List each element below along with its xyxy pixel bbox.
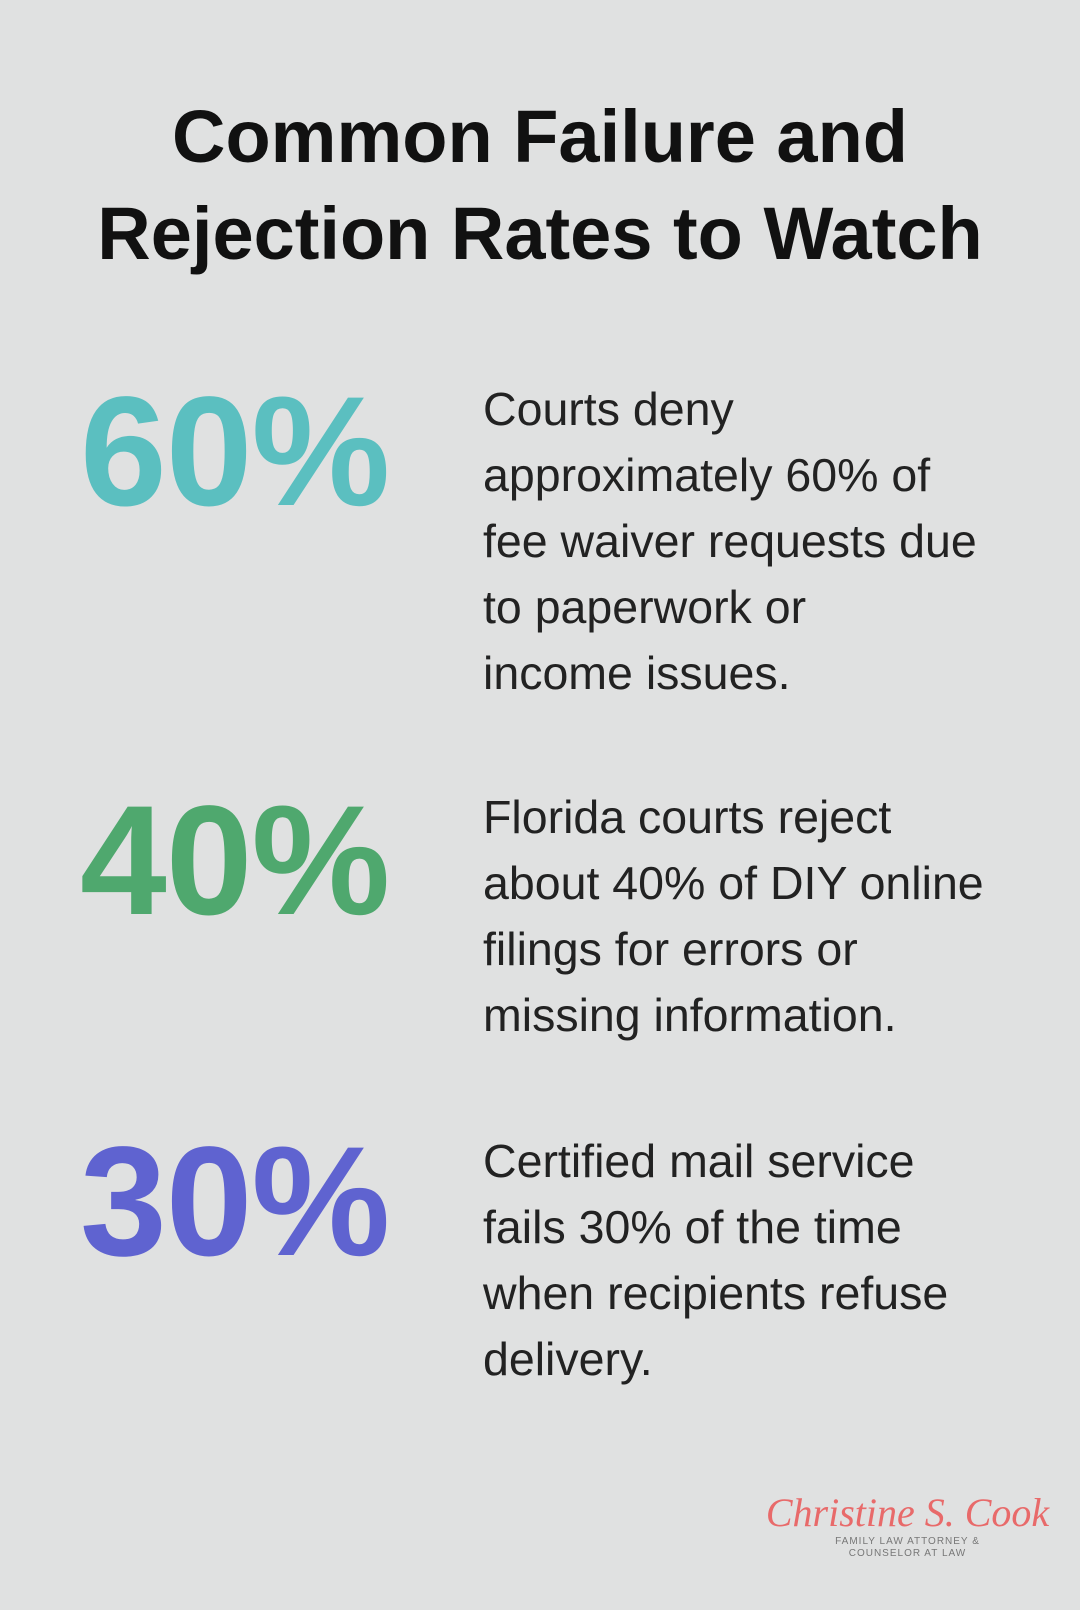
text: 30% description: delivery. bbox=[483, 1333, 653, 1385]
text: 40% description: missing information. bbox=[483, 989, 896, 1041]
text: 60% description: to paperwork or bbox=[483, 581, 806, 633]
title: Common Failure and bbox=[172, 95, 908, 178]
title: Rejection Rates to Watch bbox=[97, 192, 983, 275]
text: 30% description: fails 30% of the time bbox=[483, 1201, 902, 1253]
text: 40% description: filings for errors or bbox=[483, 923, 858, 975]
text: 40% description: about 40% of DIY online bbox=[483, 857, 984, 909]
logo bbox=[766, 1490, 1050, 1559]
logo: FAMILY LAW ATTORNEY & bbox=[835, 1536, 980, 1547]
title bbox=[97, 95, 983, 275]
stat: 40%: 40% bbox=[80, 774, 389, 948]
stat: 30%: 30% bbox=[80, 1115, 389, 1289]
text: 60% description: fee waiver requests due bbox=[483, 515, 977, 567]
text: 30% description: Certified mail service bbox=[483, 1135, 915, 1187]
text: 60% description bbox=[483, 383, 977, 699]
text: 60% description: approximately 60% of bbox=[483, 449, 930, 501]
logo: Christine S. Cook bbox=[766, 1490, 1049, 1535]
text: 30% description bbox=[483, 1135, 948, 1385]
text: 60% description: Courts deny bbox=[483, 383, 734, 435]
text: 40% description bbox=[483, 791, 984, 1041]
text: 30% description: when recipients refuse bbox=[483, 1267, 948, 1319]
text: 60% description: income issues. bbox=[483, 647, 791, 699]
text: 40% description: Florida courts reject bbox=[483, 791, 891, 843]
logo: COUNSELOR AT LAW bbox=[849, 1548, 966, 1559]
stat: 60%: 60% bbox=[80, 365, 389, 539]
